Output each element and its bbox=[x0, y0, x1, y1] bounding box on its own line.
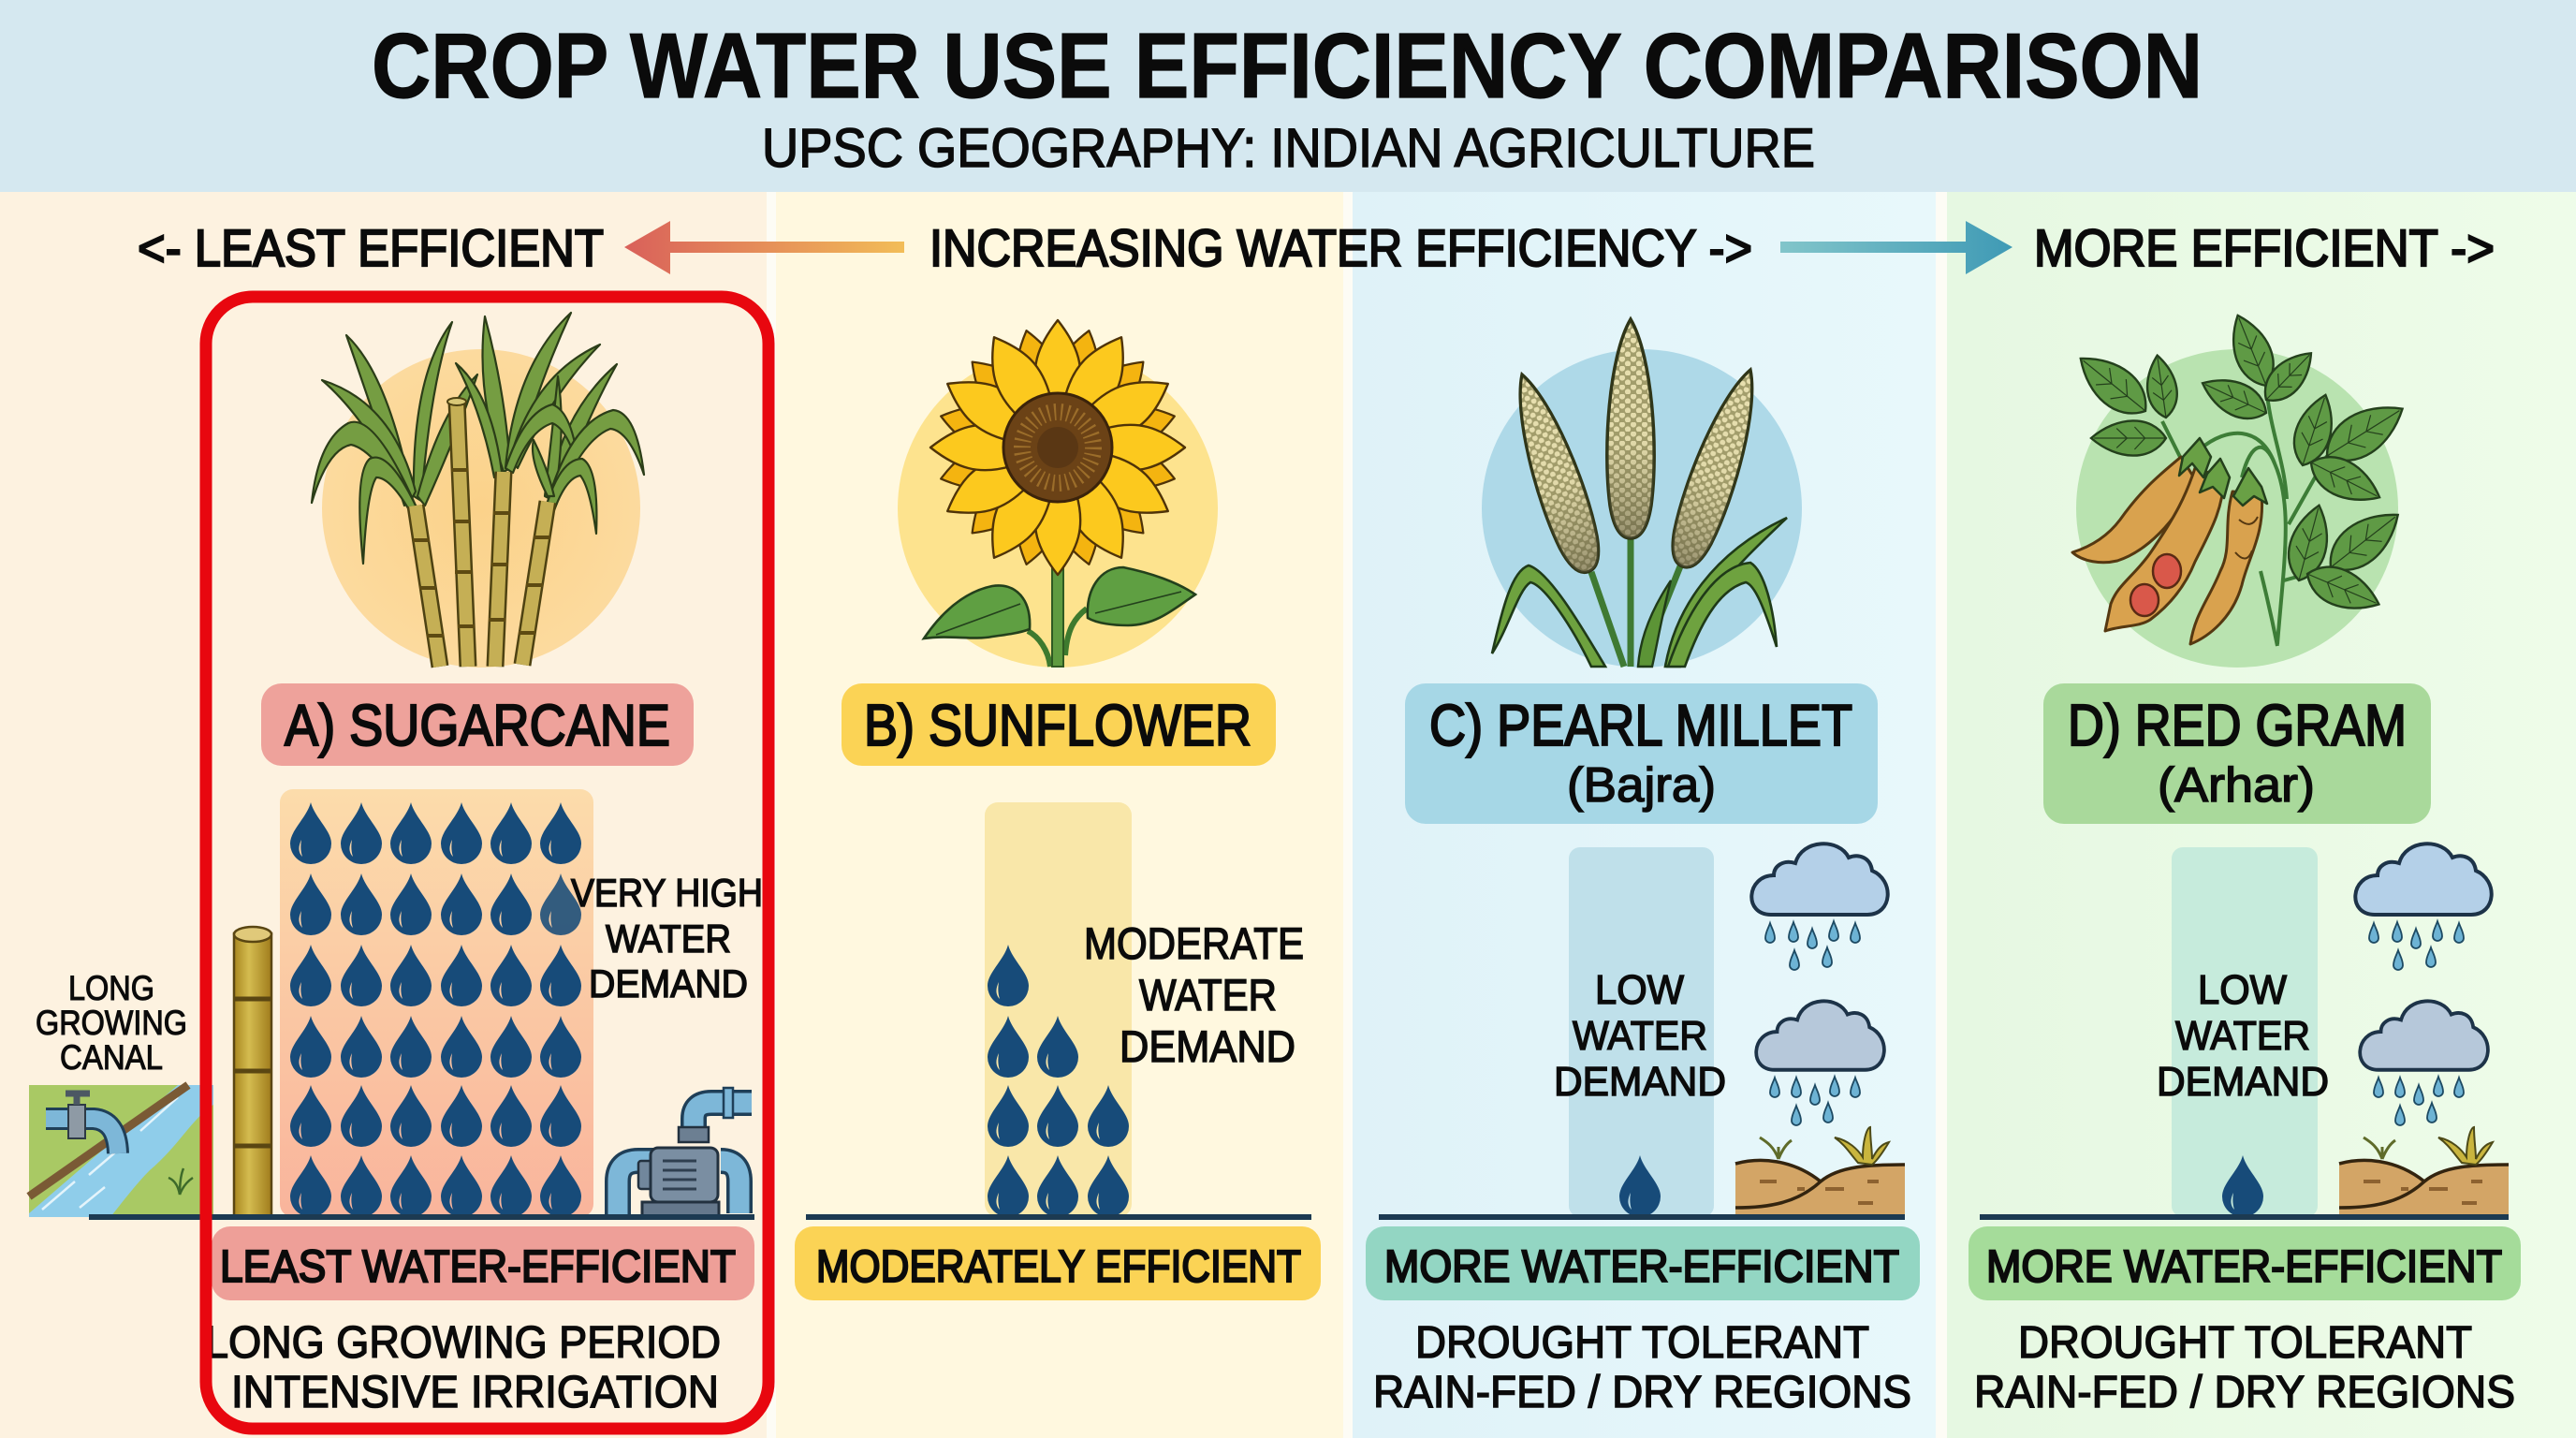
pearl millet illustration bbox=[1482, 319, 1802, 668]
efficiency pill: MODERATELY EFFICIENT bbox=[816, 1242, 1301, 1292]
canal label: GROWING bbox=[36, 1004, 187, 1042]
demand label: DEMAND bbox=[589, 961, 748, 1005]
demand label: VERY HIGH bbox=[571, 871, 763, 915]
efficiency pill bbox=[1969, 1226, 2521, 1300]
crop name badge: (Arhar) bbox=[2158, 758, 2315, 813]
icon: bamboo cane bbox=[233, 927, 272, 1217]
demand label: LOW bbox=[1595, 967, 1684, 1013]
growing notes: INTENSIVE IRRIGATION bbox=[231, 1368, 719, 1417]
growing notes: RAIN-FED / DRY REGIONS bbox=[1974, 1368, 2515, 1417]
efficiency pill bbox=[212, 1226, 754, 1300]
icon: water pump bbox=[618, 1088, 752, 1217]
subtitle: UPSC GEOGRAPHY: INDIAN AGRICULTURE bbox=[762, 118, 1815, 179]
icon: canal with tap bbox=[29, 1085, 213, 1217]
demand label bbox=[1554, 967, 1726, 1105]
label: increasing water efficiency: INCREASING WATER EFFICIENCY -> bbox=[929, 218, 1752, 277]
demand label bbox=[571, 871, 763, 1005]
canal label: CANAL bbox=[60, 1038, 163, 1077]
growing notes bbox=[1974, 1318, 2515, 1417]
growing notes: DROUGHT TOLERANT bbox=[1415, 1318, 1869, 1368]
panel: sunflower bbox=[776, 192, 1343, 1438]
efficiency pill bbox=[795, 1226, 1321, 1300]
water demand bar with drops bbox=[985, 802, 1132, 1217]
demand label: WATER bbox=[606, 917, 731, 961]
growing notes bbox=[1373, 1318, 1911, 1417]
demand label: DEMAND bbox=[2157, 1059, 2329, 1105]
efficiency pill: LEAST WATER-EFFICIENT bbox=[220, 1242, 736, 1292]
demand label: DEMAND bbox=[1120, 1021, 1295, 1071]
efficiency scale row bbox=[138, 218, 2495, 277]
demand label: WATER bbox=[1573, 1013, 1707, 1059]
arrow: pointing right bbox=[1780, 221, 2012, 274]
icon: rain clouds and dry soil bbox=[2339, 844, 2509, 1214]
callout: red highlight around sugarcane bbox=[206, 297, 768, 1429]
panel: sugarcane bbox=[0, 192, 767, 1438]
water demand bar with drop bbox=[1569, 847, 1714, 1217]
canal label: LONG bbox=[68, 969, 154, 1007]
sugarcane illustration bbox=[312, 313, 644, 668]
title: CROP WATER USE EFFICIENCY COMPARISON bbox=[372, 14, 2203, 117]
crop name badge: C) PEARL MILLET bbox=[1429, 694, 1852, 758]
growing notes bbox=[205, 1318, 721, 1417]
demand label: MODERATE bbox=[1084, 918, 1304, 968]
efficiency pill: MORE WATER-EFFICIENT bbox=[1384, 1242, 1899, 1292]
crop name badge: A) SUGARCANE bbox=[285, 694, 670, 758]
label: more efficient: MORE EFFICIENT -> bbox=[2034, 218, 2495, 277]
crop name badge bbox=[1405, 683, 1878, 824]
water demand bar with drop bbox=[2172, 847, 2318, 1217]
label: least efficient: <- LEAST EFFICIENT bbox=[138, 218, 604, 277]
demand label bbox=[1084, 918, 1304, 1071]
demand label: LOW bbox=[2198, 967, 2287, 1013]
demand label: DEMAND bbox=[1554, 1059, 1726, 1105]
crop name badge: B) SUNFLOWER bbox=[864, 694, 1251, 758]
canal label bbox=[36, 969, 187, 1077]
crop name badge: D) RED GRAM bbox=[2068, 694, 2407, 758]
demand label bbox=[2157, 967, 2329, 1105]
icon: rain clouds and dry soil bbox=[1735, 844, 1905, 1214]
header band bbox=[0, 0, 2576, 192]
crop name badge: (Bajra) bbox=[1567, 758, 1716, 813]
sunflower illustration bbox=[898, 320, 1218, 668]
demand label: WATER bbox=[2175, 1013, 2310, 1059]
panel: red gram bbox=[1947, 192, 2576, 1438]
efficiency pill bbox=[1366, 1226, 1920, 1300]
efficiency pill: MORE WATER-EFFICIENT bbox=[1986, 1242, 2502, 1292]
water demand bar with drops bbox=[280, 789, 593, 1217]
crop name badge bbox=[2043, 683, 2431, 824]
growing notes: LONG GROWING PERIOD bbox=[205, 1318, 721, 1368]
growing notes: RAIN-FED / DRY REGIONS bbox=[1373, 1368, 1911, 1417]
red gram illustration bbox=[2069, 309, 2413, 668]
growing notes: DROUGHT TOLERANT bbox=[2018, 1318, 2472, 1368]
demand label: WATER bbox=[1139, 970, 1277, 1020]
panel: pearl millet bbox=[1353, 192, 1936, 1438]
arrow: pointing left bbox=[624, 221, 904, 274]
